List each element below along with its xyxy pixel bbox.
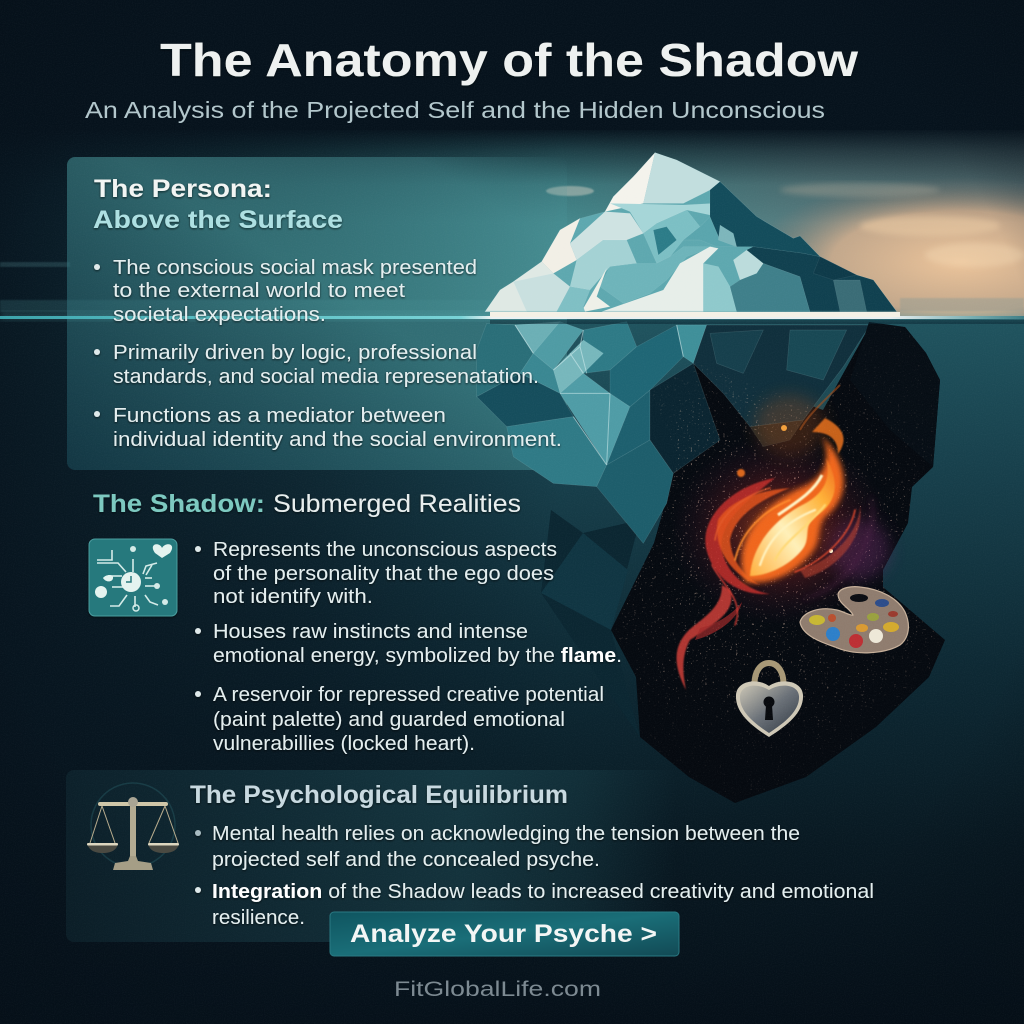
title: The Anatomy of the Shadow	[160, 34, 858, 86]
bullet list: shadow: vulnerabillies (locked heart).	[213, 733, 475, 755]
bullet list: equilibrium: Mental health relies on acknowledging the tension between the	[212, 823, 800, 845]
submerged light teal ice	[477, 322, 870, 543]
button: analyze your psyche: Analyze Your Psyche >	[350, 920, 657, 948]
iceberg above water	[485, 153, 897, 312]
stars in dark mass	[611, 327, 961, 807]
bullet list: shadow: of the personality that the ego does	[213, 563, 554, 585]
bullet list: persona: The conscious social mask presented	[113, 257, 477, 279]
icon: paint palette	[800, 587, 908, 653]
black upper right of mass	[850, 322, 940, 467]
iceberg below water	[477, 322, 961, 807]
crackle highlights	[515, 325, 683, 465]
bullet list: persona: standards, and social media represenatation.	[113, 366, 539, 388]
bullet list: shadow: Houses raw instincts and intense	[213, 621, 528, 643]
subtitle: An Analysis of the Projected Self and the Hidden Unconscious	[85, 97, 825, 123]
bullet list: persona: to the external world to meet	[113, 280, 406, 302]
bullet list: shadow: emotional energy, symbolized by the flame.	[213, 645, 622, 667]
icon: balance scales	[87, 783, 179, 870]
heading: above the surface: Above the Surface	[93, 206, 343, 234]
bullet list: equilibrium	[195, 823, 874, 929]
bullet list: persona: Functions as a mediator between	[113, 405, 446, 427]
button: analyze your psyche	[330, 912, 679, 956]
submerged dark mass	[611, 327, 945, 803]
bullet list: persona: individual identity and the social environment.	[113, 429, 562, 451]
section: the shadow	[89, 490, 622, 755]
footer: website: FitGlobalLife.com	[394, 978, 601, 1001]
bullet list: shadow	[195, 539, 622, 755]
bullet list: persona	[94, 257, 562, 451]
heading: persona: The Persona:	[94, 175, 272, 203]
bullet list: equilibrium: resilience.	[212, 907, 305, 929]
bullet list: shadow: not identify with.	[213, 586, 373, 608]
flame and nebula	[670, 385, 890, 690]
icon: heart lock	[736, 663, 803, 737]
bullet list: persona: societal expectations.	[113, 304, 326, 326]
bullet list: equilibrium: projected self and the concealed psyche.	[212, 849, 600, 871]
heading: the shadow: The Shadow:	[93, 490, 265, 518]
bullet list: shadow: Represents the unconscious aspects	[213, 539, 557, 561]
bullet list: shadow: (paint palette) and guarded emotional	[213, 709, 565, 731]
flame wisps	[712, 488, 855, 625]
heading: the shadow	[93, 490, 521, 518]
panel: persona background	[67, 157, 567, 470]
waterline	[0, 312, 1024, 324]
bullet list: shadow: A reservoir for repressed creative potential	[213, 684, 604, 706]
icon: psyche circuit tile	[89, 539, 177, 616]
heading: the shadow: Submerged Realities	[273, 490, 521, 518]
submerged dark teal facets	[693, 325, 870, 427]
heading: equilibrium: The Psychological Equilibrium	[190, 781, 568, 809]
panel: the psychological equilibrium	[66, 770, 874, 942]
bullet list: persona: Primarily driven by logic, professional	[113, 342, 477, 364]
bullet list: equilibrium: Integration of the Shadow leads to increased creativity and emotional	[212, 881, 874, 903]
submerged lower facets	[541, 510, 640, 737]
panel: the persona	[93, 175, 562, 451]
